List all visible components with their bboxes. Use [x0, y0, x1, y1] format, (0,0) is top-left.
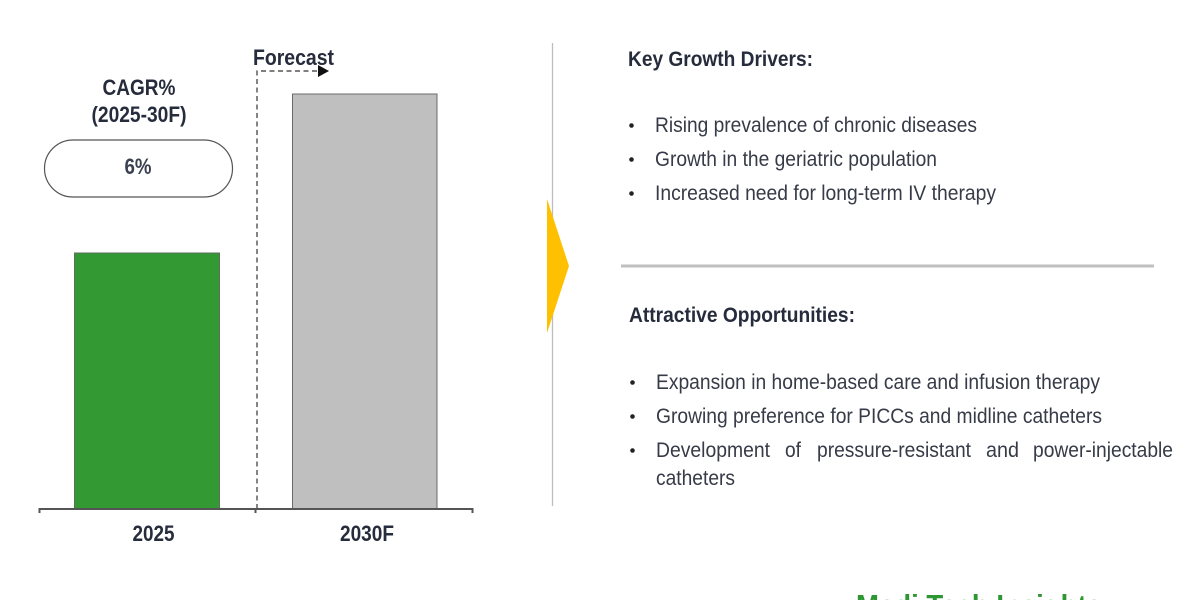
- axis label: 2030F: 2030F: [340, 521, 394, 546]
- vertical divider: [552, 43, 554, 506]
- forecast dashed marker: [257, 65, 329, 509]
- bullet list: catheters: [656, 466, 735, 490]
- bullet list: Growing preference for PICCs and midline catheters: [656, 404, 1102, 428]
- bullet list: [629, 113, 996, 205]
- axis label: 2025: 2025: [132, 521, 174, 546]
- bullet list: power-injectable: [1033, 438, 1173, 462]
- panel: key growth drivers: [628, 47, 996, 205]
- heading: Attractive Opportunities:: [629, 303, 855, 327]
- horizontal divider: [621, 264, 1154, 268]
- forecast label: Forecast: [253, 45, 334, 70]
- bullet list: Growth in the geriatric population: [655, 147, 937, 171]
- heading: Key Growth Drivers:: [628, 47, 813, 71]
- bullet list: Development: [656, 438, 770, 462]
- bullet list: and: [986, 438, 1019, 462]
- bullet list: of: [785, 438, 801, 462]
- bullet list: [630, 370, 1173, 490]
- bar: 2030F: [292, 94, 437, 509]
- CAGR pill: [44, 140, 232, 197]
- bullet list: Expansion in home-based care and infusion therapy: [656, 370, 1100, 394]
- bullet list: Rising prevalence of chronic diseases: [655, 113, 977, 137]
- CAGR heading: [92, 75, 186, 127]
- CAGR pill: 6%: [124, 154, 152, 179]
- arrow: chevron: [547, 199, 569, 333]
- bullet list: Increased need for long-term IV therapy: [655, 181, 996, 205]
- bar: 2025: [74, 253, 220, 509]
- axis: [40, 509, 472, 513]
- CAGR heading: (2025-30F): [92, 102, 186, 127]
- panel: attractive opportunities: [629, 303, 1173, 490]
- CAGR heading: CAGR%: [102, 75, 176, 100]
- bullet list: pressure-resistant: [817, 438, 971, 462]
- panel: forecast bar chart: [40, 45, 472, 546]
